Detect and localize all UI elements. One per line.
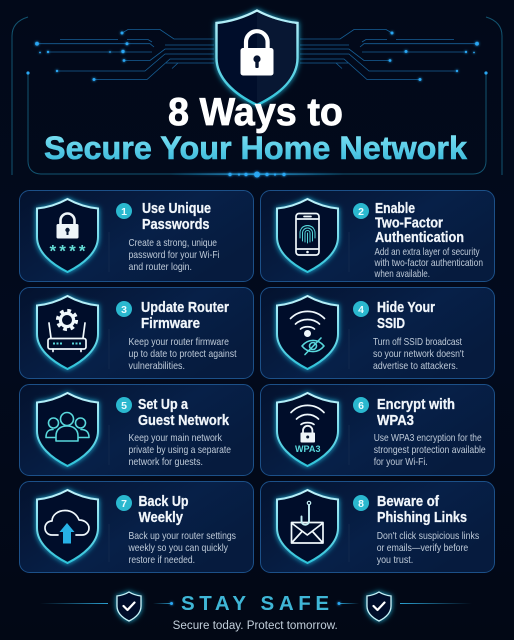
description: Add an extra layer of security [374, 246, 480, 258]
heading [138, 494, 189, 526]
description: you trust. [377, 554, 413, 566]
center glowing dots [170, 172, 344, 178]
icon: shield with three people [37, 393, 98, 466]
heading: Use Unique [142, 201, 211, 217]
footer tagline: Secure today. Protect tomorrow. [173, 620, 338, 632]
icon: shield with phone fingerprint [277, 199, 338, 272]
heading [377, 397, 455, 429]
heading: Passwords [142, 217, 210, 233]
heading [377, 494, 467, 526]
icon: shield with lock and asterisks: **** [50, 242, 86, 260]
title [44, 91, 467, 166]
heading: Update Router [141, 300, 229, 316]
heading [142, 201, 211, 233]
number badge 6: 6 [358, 400, 364, 412]
description [128, 530, 236, 566]
icon: footer left check shield [117, 592, 141, 621]
panel: 8 beware of phishing links [260, 482, 494, 572]
description: or emails—verify before [377, 542, 468, 554]
heading: Firmware [141, 316, 200, 332]
icon: shield with hook and envelope [277, 490, 338, 563]
heading [141, 300, 229, 332]
icon: shield with wifi lock wpa3 [277, 393, 338, 466]
icon: shield with lock and asterisks [37, 199, 98, 272]
description: for your Wi-Fi. [374, 456, 428, 468]
number badge 8 [353, 495, 369, 511]
description [128, 432, 231, 468]
heading: SSID [377, 316, 405, 332]
number badge 3: 3 [121, 304, 127, 316]
heading: Back Up [138, 494, 189, 510]
description: so your network doesn't [373, 348, 464, 360]
heading: Set Up a [138, 397, 189, 413]
description: Turn off SSID broadcast [373, 336, 462, 348]
number badge 8: 8 [358, 498, 364, 510]
heading: Hide Your [377, 300, 435, 316]
panel: 4 hide your ssid [260, 288, 494, 378]
description: and router login. [128, 261, 192, 273]
icon: padlock [240, 31, 274, 76]
number badge 3 [116, 301, 132, 317]
description [128, 237, 220, 273]
icon: shield with wifi and crossed eye [277, 296, 338, 369]
number badge 6 [353, 397, 369, 413]
panel: 6 encrypt with wpa3 [260, 384, 494, 476]
description: weekly so you can quickly [128, 542, 229, 554]
panel: 1 use unique passwords [20, 190, 254, 282]
description: Create a strong, unique [128, 237, 217, 249]
number badge 4: 4 [358, 304, 364, 316]
description: Don't click suspicious links [377, 530, 479, 542]
number badge 7 [116, 495, 132, 511]
footer connector lines [40, 602, 472, 605]
description: network for guests. [128, 456, 203, 468]
description [377, 530, 479, 566]
panel: 7 back up weekly [20, 482, 254, 572]
heading: Authentication [375, 230, 464, 246]
description: Keep your main network [128, 432, 223, 444]
description: Keep your router firmware [128, 336, 229, 348]
heading: Phishing Links [377, 510, 467, 526]
description: Back up your router settings [128, 530, 236, 542]
header frame [12, 17, 502, 175]
description: password for your Wi-Fi [128, 249, 220, 261]
heading: Enable [375, 201, 415, 217]
number badge 5: 5 [121, 400, 127, 412]
heading: WPA3 [377, 413, 414, 429]
heading: Guest Network [138, 413, 230, 429]
description: Use WPA3 encryption for the [374, 432, 482, 444]
icon: shield with gear and router [37, 296, 98, 369]
icon: shield with wifi lock wpa3: WPA3 [295, 444, 320, 455]
panel: 3 update router firmware [20, 288, 254, 378]
description [373, 336, 464, 372]
description: when available. [374, 268, 430, 280]
number badge 2: 2 [358, 206, 364, 218]
footer heading: STAY SAFE [181, 592, 329, 615]
description: restore if needed. [128, 554, 195, 566]
icon: footer right check shield [367, 592, 391, 621]
description: strongest protection available [374, 444, 486, 456]
description: with two-factor authentication [374, 257, 483, 269]
panel: 2 two-factor authentication [260, 190, 494, 282]
description [374, 246, 483, 280]
heading: Beware of [377, 494, 439, 510]
description: private by using a separate [128, 444, 231, 456]
heading: Encrypt with [377, 397, 455, 413]
hero shield with padlock [216, 10, 298, 105]
icon: shield with cloud upload [37, 490, 98, 563]
heading: Two-Factor [375, 216, 443, 232]
description: up to date to protect against [128, 348, 237, 360]
heading: Weekly [138, 510, 184, 526]
heading [375, 201, 464, 246]
description [374, 432, 486, 468]
number badge 5 [116, 397, 132, 413]
number badge 7: 7 [121, 498, 127, 510]
description [128, 336, 237, 372]
circuit lines right [300, 30, 479, 81]
description: advertise to attackers. [373, 360, 458, 372]
title: Secure Your Home Network [44, 130, 467, 166]
title: 8 Ways to [168, 91, 343, 134]
number badge 4 [353, 301, 369, 317]
heading [138, 397, 230, 429]
number badge 1 [116, 203, 132, 219]
circuit lines left [35, 30, 214, 81]
number badge 2 [353, 203, 369, 219]
description: vulnerabilities. [128, 360, 185, 372]
heading [377, 300, 435, 332]
number badge 1: 1 [121, 206, 127, 218]
panel: 5 guest network [20, 384, 254, 476]
